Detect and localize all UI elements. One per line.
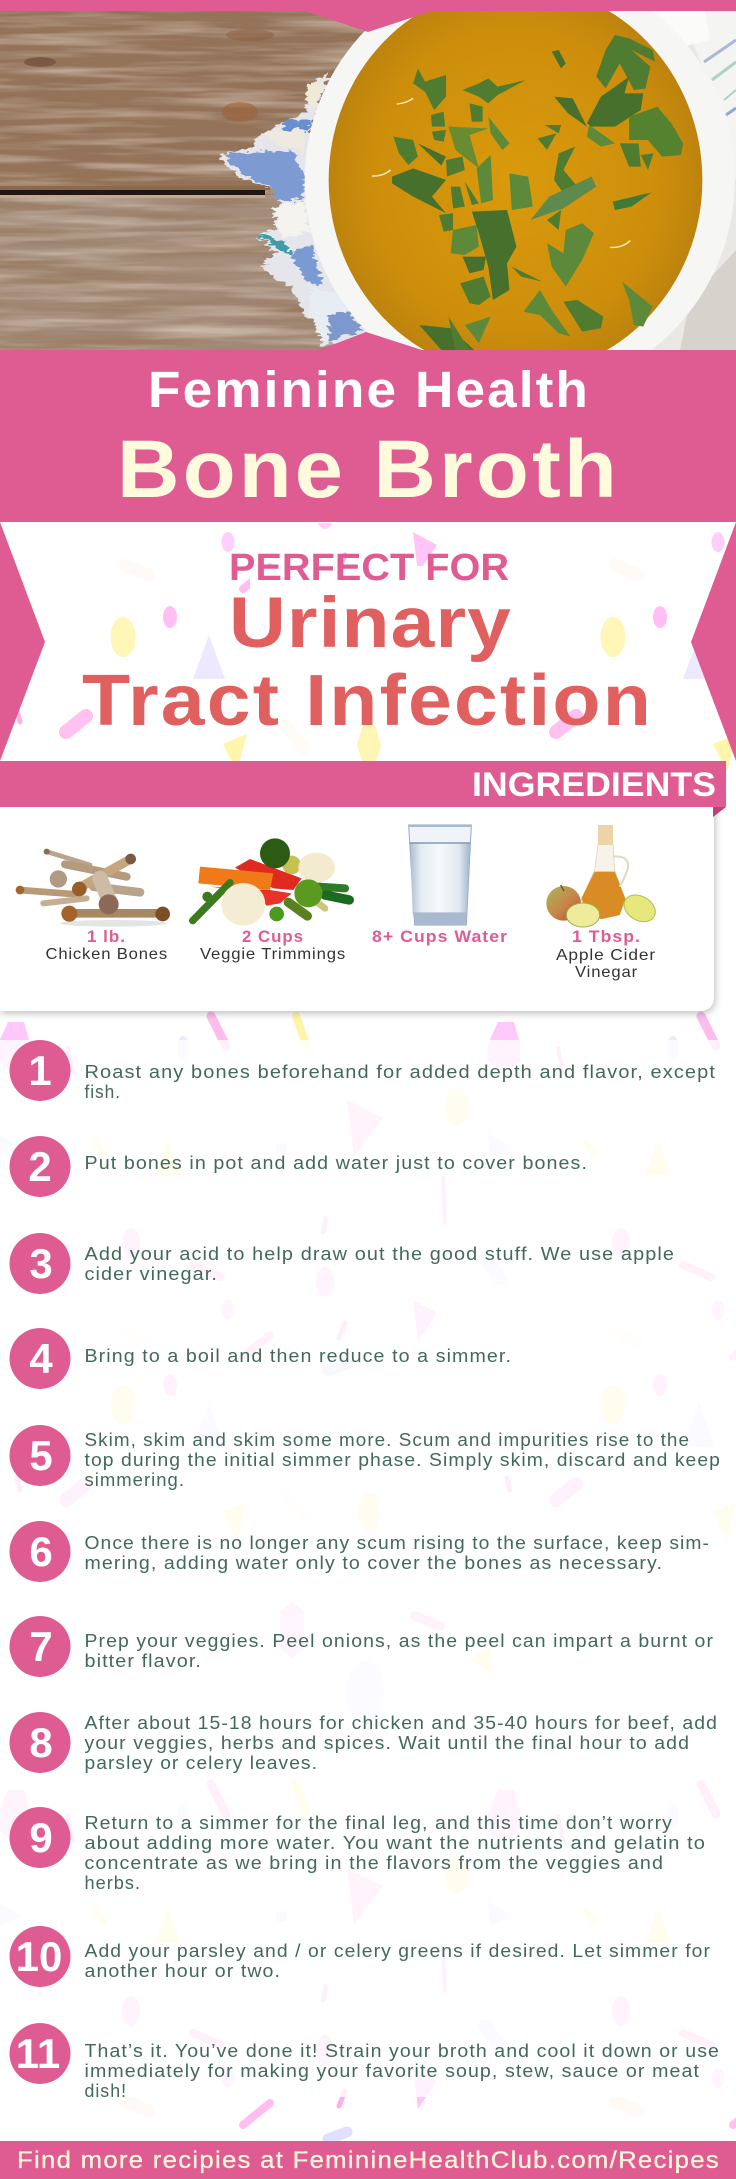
step 2: [10, 1136, 588, 1197]
step 1: 1: [28, 1047, 52, 1094]
ingredient icons: [16, 825, 660, 927]
step 9: [10, 1807, 706, 1893]
step 9: 9: [29, 1814, 53, 1861]
step 5: 5: [29, 1432, 53, 1479]
icon: apple cider vinegar and apples: [546, 825, 660, 927]
napkin fringe: [216, 72, 371, 347]
step 3: Add your acid to help draw out the good stuff. We use apple: [84, 1244, 675, 1264]
step 7: Prep your veggies. Peel onions, as the peel can impart a burnt or: [84, 1631, 714, 1651]
bowl rim: [304, 11, 734, 350]
step 2: 2: [28, 1143, 52, 1190]
label: apple cider vinegar: [556, 927, 656, 981]
label: apple cider vinegar: Apple Cider: [556, 947, 656, 964]
backdrop cloth and handle: [652, 11, 736, 350]
step 2: Put bones in pot and add water just to cover bones.: [84, 1153, 588, 1173]
icon: glass of water: [409, 825, 471, 926]
step 3: cider vinegar.: [84, 1264, 218, 1284]
header band: [0, 332, 736, 522]
footer bar: [0, 2141, 736, 2179]
step 6: Once there is no longer any scum rising to the surface, keep sim-: [84, 1533, 710, 1553]
perfect for: PERFECT FOR: [229, 547, 509, 589]
step 8: [10, 1712, 718, 1773]
label: veggie trimmings: [200, 927, 346, 963]
step 1: Roast any bones beforehand for added depth and flavor, except: [84, 1062, 716, 1082]
label: veggie trimmings: Veggie Trimmings: [200, 946, 346, 963]
step 6: [10, 1521, 710, 1582]
step 11: 11: [16, 2030, 60, 2077]
label: veggie trimmings: 2 Cups: [242, 927, 304, 946]
step 5: top during the initial simmer phase. Simply skim, discard and keep: [84, 1450, 721, 1470]
step 10: Add your parsley and / or celery greens if desired. Let simmer for: [84, 1941, 711, 1961]
ingredients banner: INGREDIENTS: [472, 766, 716, 804]
main title: Bone Broth: [117, 424, 620, 515]
step 9: concentrate as we bring in the flavors from the veggies and: [84, 1853, 664, 1873]
label: apple cider vinegar: Vinegar: [575, 964, 638, 981]
step 8: 8: [29, 1719, 53, 1766]
steps list: [10, 1040, 721, 2101]
icon: vegetables: [193, 838, 349, 926]
step 7: [10, 1616, 714, 1677]
step 3: 3: [29, 1240, 53, 1287]
step 4: [10, 1328, 512, 1389]
wood table: [0, 11, 400, 350]
step 5: Skim, skim and skim some more. Scum and impurities rise to the: [84, 1430, 690, 1450]
ingredient labels: [46, 927, 656, 981]
step 11: immediately for making your favorite soup, stew, sauce or meat: [84, 2061, 700, 2081]
step 9: herbs.: [84, 1873, 141, 1893]
ingredients banner: [0, 761, 726, 817]
label: apple cider vinegar: 1 Tbsp.: [572, 927, 641, 946]
ribbon notches: [0, 522, 736, 761]
top pink band with notch: [0, 0, 736, 32]
step 3: [10, 1233, 675, 1294]
step 10: another hour or two.: [84, 1961, 281, 1981]
step 11: dish!: [84, 2081, 127, 2101]
broth: [329, 0, 702, 375]
label: chicken bones: Chicken Bones: [46, 946, 168, 963]
hero photo: bowl of bone broth on wood: [0, 11, 736, 350]
confetti background pattern: [0, 523, 736, 2141]
step 10: [10, 1926, 711, 1987]
subtitle: Feminine Health: [148, 361, 590, 418]
step 11: That’s it. You’ve done it! Strain your broth and cool it down or use: [84, 2041, 720, 2061]
step 9: about adding more water. You want the nutrients and gelatin to: [84, 1833, 706, 1853]
label: water: 8+ Cups Water: [372, 927, 508, 946]
step 5: [10, 1425, 721, 1490]
oil highlights: [372, 98, 630, 247]
label: chicken bones: 1 lb.: [87, 927, 126, 946]
parsley leaves: [392, 35, 683, 350]
urinary: Urinary: [229, 584, 512, 663]
step 9: Return to a simmer for the final leg, and this time don’t worry: [84, 1813, 673, 1833]
step 1: fish.: [84, 1082, 121, 1102]
step 8: After about 15-18 hours for chicken and 35-40 hours for beef, add: [84, 1713, 718, 1733]
step 5: simmering.: [84, 1470, 185, 1490]
step 1: [10, 1040, 716, 1102]
ribbon heading: [82, 547, 653, 741]
step 4: 4: [29, 1335, 53, 1382]
bowl and fringe drawn in scaled coordinates: [216, 11, 734, 350]
icon: chicken bones: [16, 849, 170, 927]
step 10: 10: [16, 1933, 62, 1980]
label: chicken bones: [46, 927, 168, 963]
step 6: 6: [29, 1528, 53, 1575]
step 8: your veggies, herbs and spices. Wait until the final hour to add: [84, 1733, 690, 1753]
step 7: bitter flavor.: [84, 1651, 202, 1671]
step 4: Bring to a boil and then reduce to a simmer.: [84, 1346, 512, 1366]
ingredients card: [0, 807, 714, 1011]
step 7: 7: [29, 1623, 53, 1670]
step 6: mering, adding water only to cover the bones as necessary.: [84, 1553, 663, 1573]
step 8: parsley or celery leaves.: [84, 1753, 318, 1773]
footer bar: Find more recipies at FeminineHealthClub.com/Recipes: [17, 2147, 720, 2174]
step 11: [10, 2023, 720, 2101]
tract infection: Tract Infection: [82, 661, 653, 741]
